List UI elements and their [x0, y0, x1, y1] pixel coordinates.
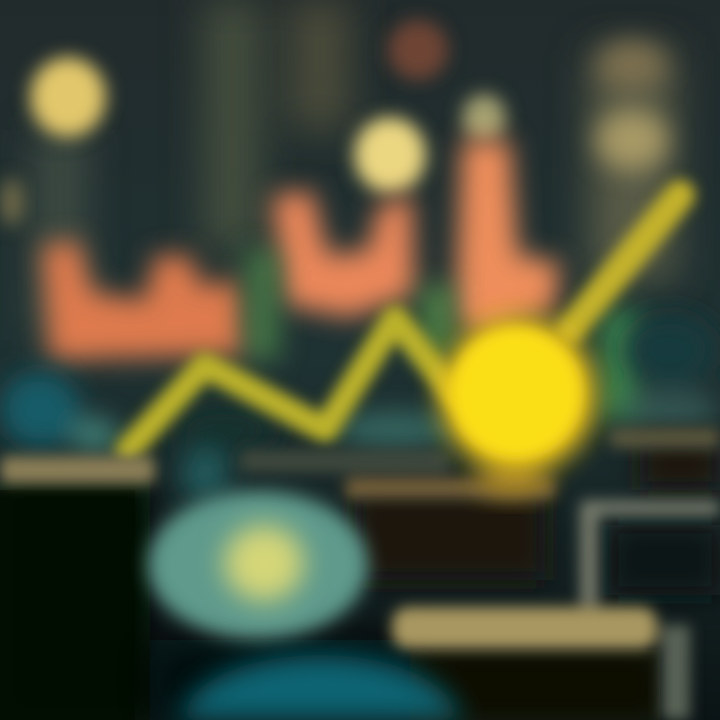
orange bar chart: [42, 140, 560, 360]
green glow accents: [245, 250, 640, 420]
foreground dark blocks: [0, 440, 720, 720]
teal coin with symbol: [148, 491, 368, 639]
coin glow: [476, 460, 548, 496]
background lights: [0, 20, 668, 226]
large yellow coin: [440, 317, 596, 473]
teal base shape: [180, 655, 462, 720]
teal mid-ground mounds: [0, 315, 720, 500]
yellow trend line: [128, 195, 680, 450]
foreground ledges: [0, 428, 720, 720]
background towers: [35, 0, 675, 340]
